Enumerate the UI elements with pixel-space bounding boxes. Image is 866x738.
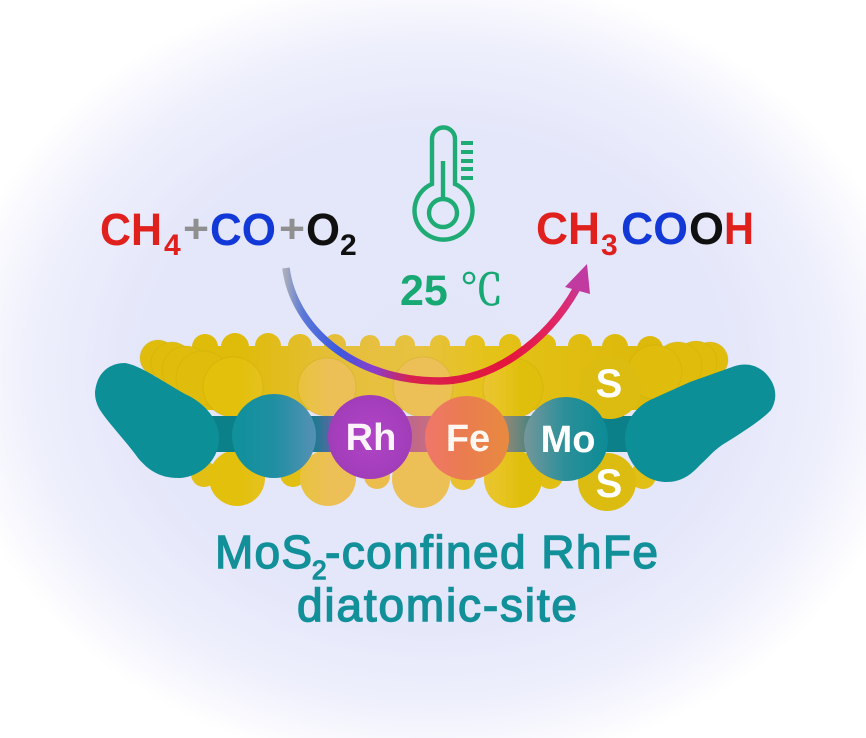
product formula: CH — [536, 203, 600, 254]
left molybdenum cylinder — [95, 363, 219, 478]
caption: 2 — [312, 555, 326, 585]
sulfur atom label, bottom: S — [596, 462, 622, 506]
product formula: 3 — [601, 229, 618, 262]
molybdenum atom, right — [524, 397, 608, 481]
iron atom: Fe — [446, 418, 490, 460]
reactants formula: O — [306, 204, 340, 255]
catalyst model: MoS2 lattice — [95, 333, 775, 511]
reactants formula — [100, 204, 357, 262]
reactants formula: CO — [210, 204, 276, 255]
temperature label: ℃ — [460, 257, 503, 318]
molybdenum atom, right: Mo — [541, 419, 595, 461]
reactants formula: CH — [100, 204, 162, 255]
temperature label: 25 — [400, 267, 448, 315]
back sulfur rows — [140, 333, 728, 410]
rhodium atom: Rh — [346, 417, 396, 459]
caption: MoS — [215, 526, 312, 578]
iron atom — [425, 396, 509, 480]
right molybdenum cylinder — [625, 364, 775, 482]
caption: -confined RhFe — [325, 526, 658, 578]
product formula: CO — [621, 203, 688, 254]
top sulfur spheres — [203, 357, 543, 418]
reactants formula: 2 — [340, 229, 357, 262]
rhodium atom — [328, 395, 412, 479]
product formula — [536, 203, 754, 262]
bottom small sulfur spheres — [191, 461, 656, 490]
reaction arrow — [286, 264, 590, 381]
sulfur atom, top: S — [596, 362, 622, 406]
molybdenum atom, left — [232, 394, 316, 478]
reactants formula: + — [279, 207, 305, 251]
reactants formula: + — [183, 207, 209, 251]
reactants formula: 4 — [164, 229, 181, 262]
caption: diatomic-site — [297, 579, 577, 631]
temperature label — [400, 257, 503, 318]
icon: thermometer — [415, 128, 473, 240]
sulfur atom, top — [579, 357, 641, 419]
caption — [215, 526, 658, 631]
product formula: H — [724, 203, 754, 254]
product formula: O — [689, 203, 724, 254]
molybdenum chain bar — [200, 416, 640, 452]
bottom sulfur spheres — [209, 450, 636, 511]
